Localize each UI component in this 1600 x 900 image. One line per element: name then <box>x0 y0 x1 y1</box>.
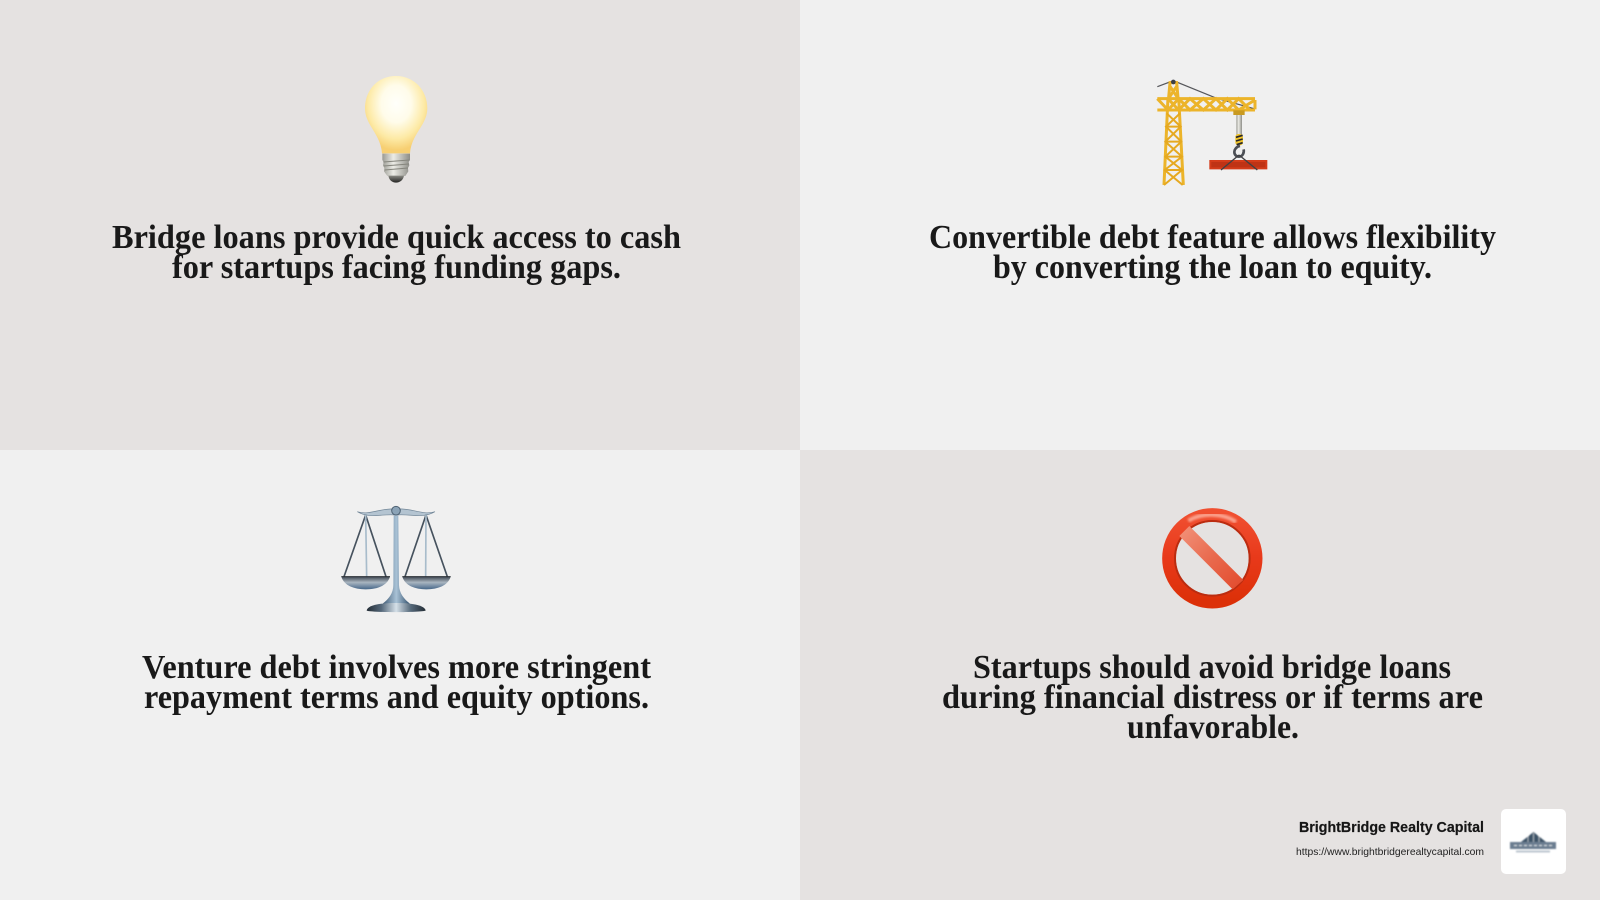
website url: https://www.brightbridgerealtycapital.com <box>1296 846 1484 858</box>
panel: bridge loans <box>0 0 800 450</box>
icon: prohibited sign <box>1169 515 1256 602</box>
heading: bridge loans text: for startups facing funding gaps. <box>172 249 621 286</box>
icon: light bulb <box>365 76 427 183</box>
heading: when to avoid text: unfavorable. <box>1127 709 1299 746</box>
heading: venture debt text: Venture debt involves more stringent <box>142 649 652 686</box>
icon: construction crane <box>1157 80 1267 185</box>
brand name: BrightBridge Realty Capital <box>1299 820 1484 836</box>
heading: when to avoid text: Startups should avoid bridge loans <box>973 649 1451 686</box>
heading: venture debt text: repayment terms and equity options. <box>144 679 649 716</box>
panel: when to avoid <box>800 450 1600 900</box>
heading: when to avoid text: during financial distress or if terms are <box>942 679 1483 716</box>
heading: convertible debt text: Convertible debt feature allows flexibility <box>929 219 1496 256</box>
heading: venture debt text <box>142 649 652 716</box>
logo card <box>1501 809 1566 874</box>
heading: when to avoid text <box>942 649 1483 746</box>
heading: bridge loans text <box>112 219 681 286</box>
heading: bridge loans text: Bridge loans provide quick access to cash <box>112 219 681 256</box>
panel: venture debt <box>0 450 800 900</box>
icon: balance scales <box>341 506 451 612</box>
heading: convertible debt text: by converting the loan to equity. <box>993 249 1432 286</box>
panel: convertible debt <box>800 0 1600 450</box>
heading: convertible debt text <box>929 219 1496 286</box>
